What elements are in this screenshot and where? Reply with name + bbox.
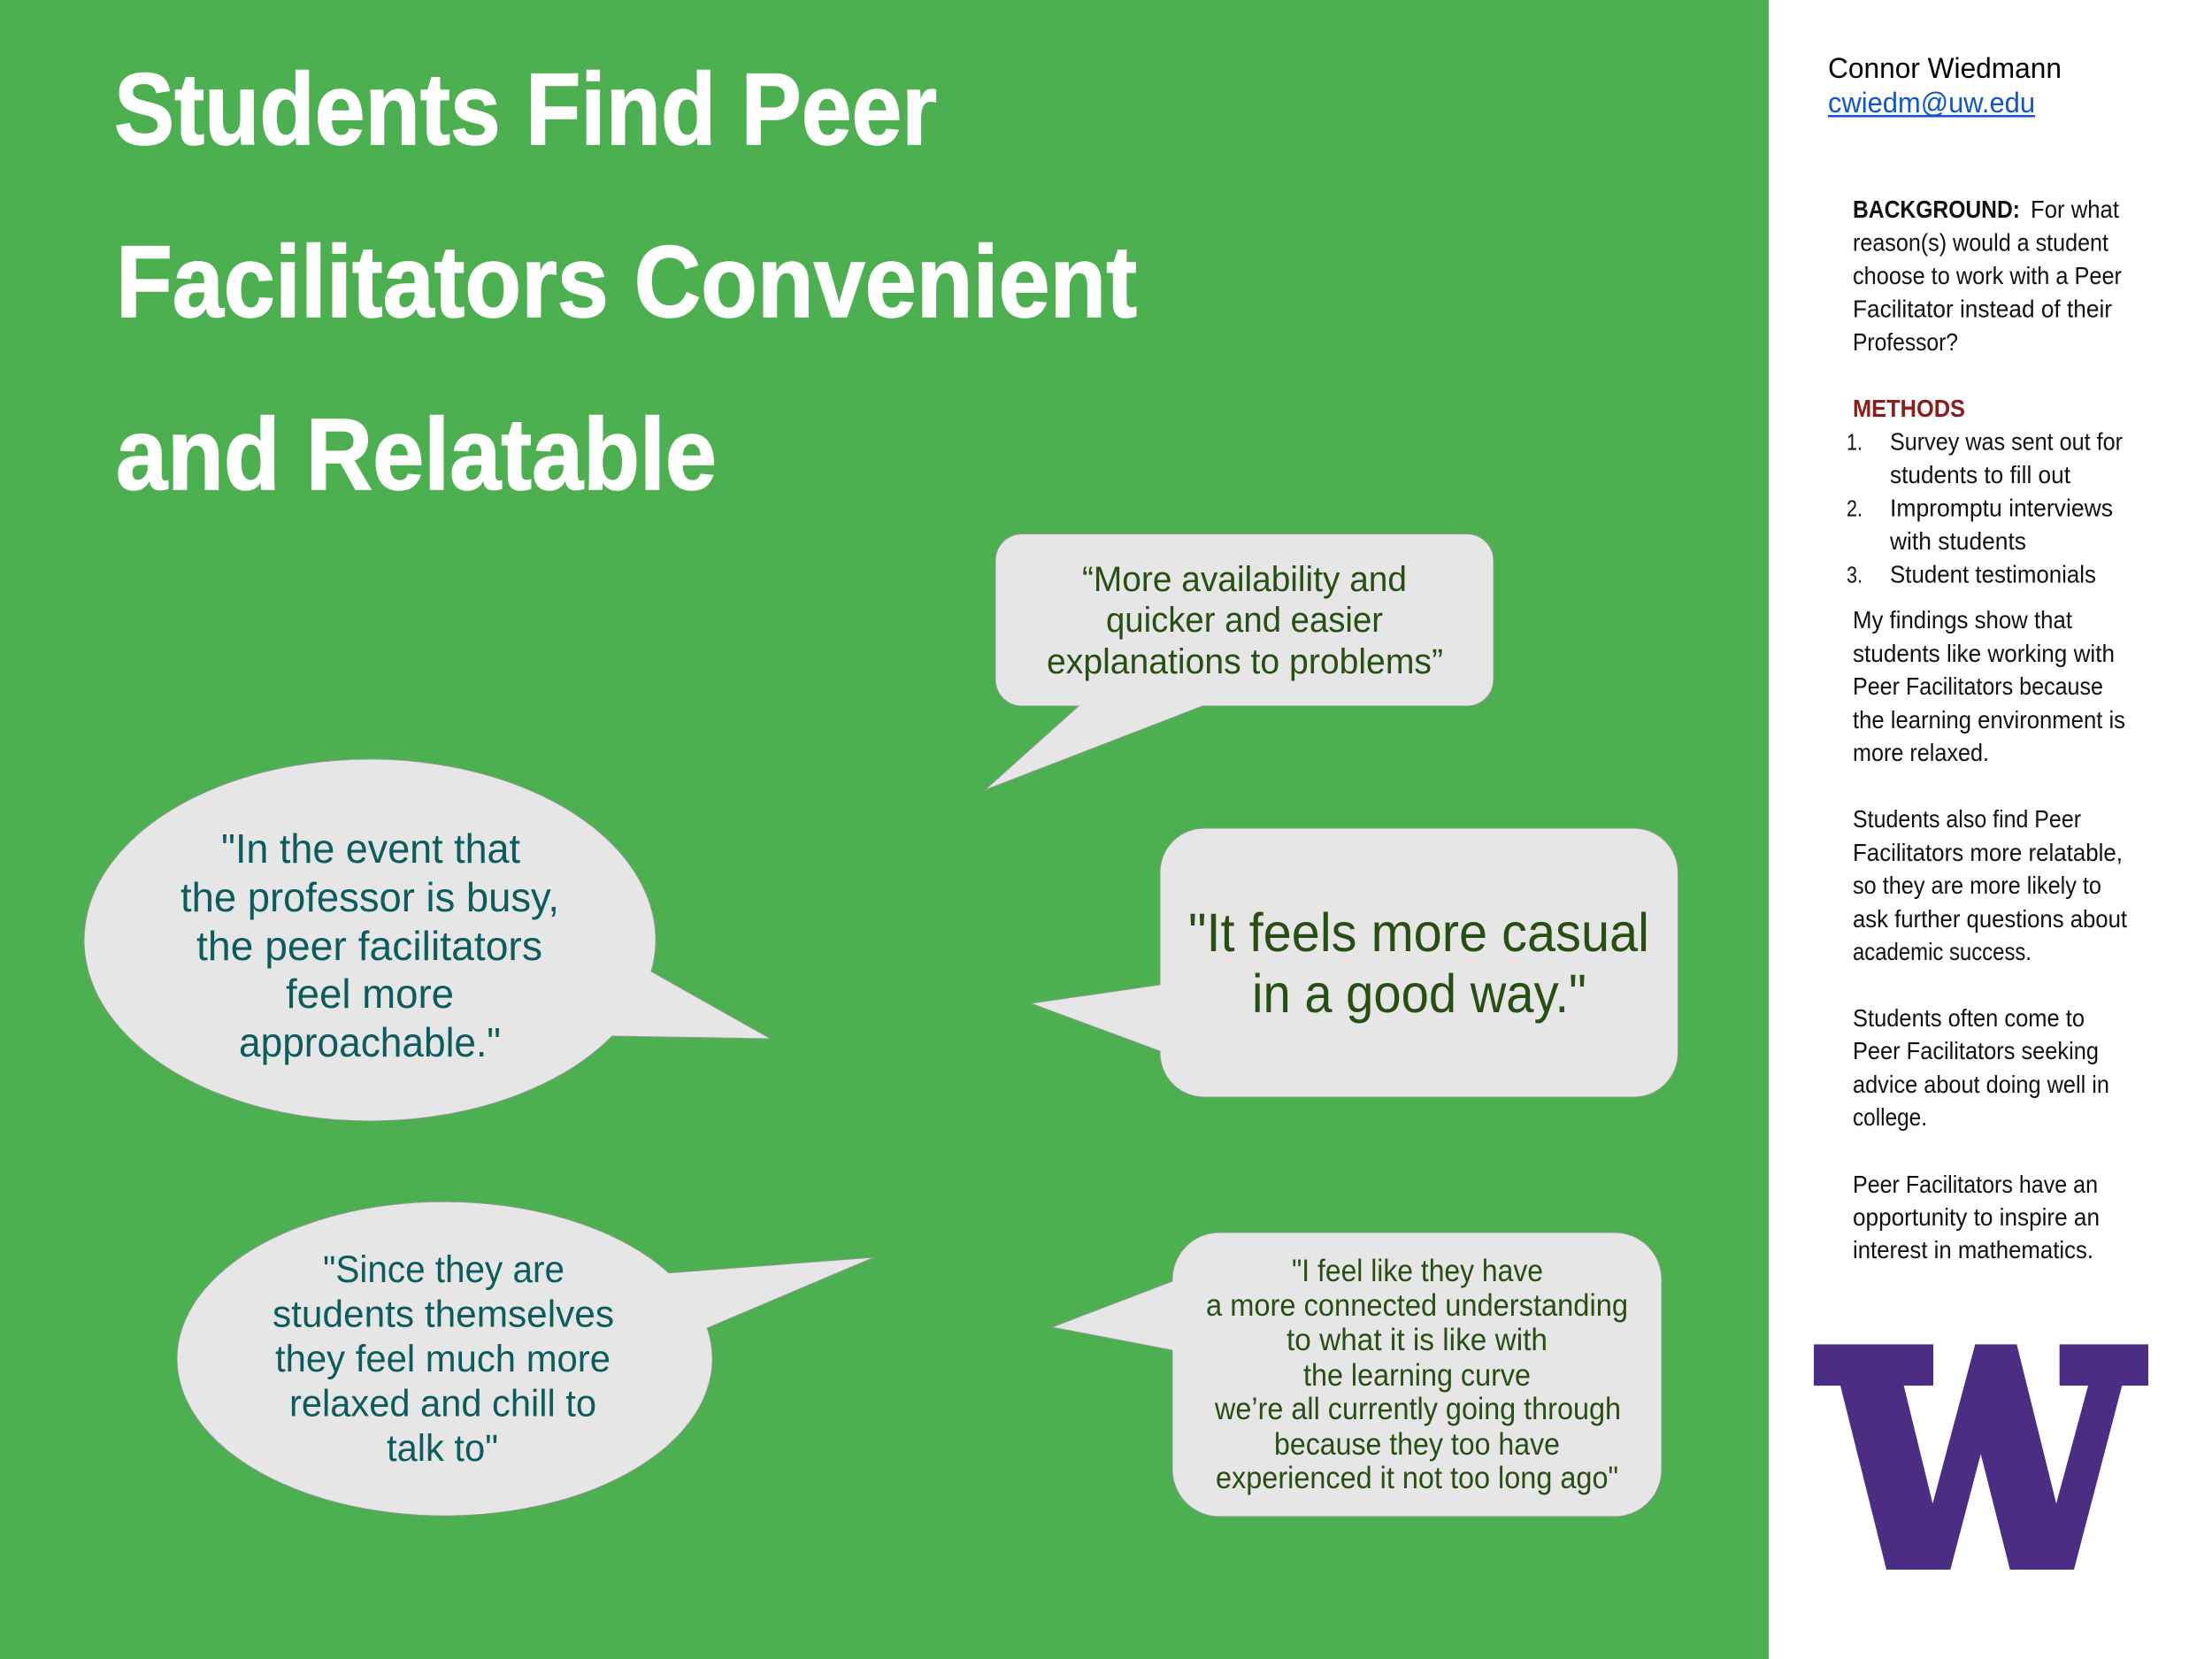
background text: choose to work with a Peer — [1853, 262, 2122, 289]
findings text: so they are more likely to — [1853, 872, 2101, 899]
findings text: more relaxed. — [1853, 739, 1989, 766]
speech bubble: professor is busy: "In the event that — [221, 826, 520, 872]
speech bubble: more availability — [985, 534, 1494, 790]
white sidebar panel — [1769, 0, 2212, 1659]
speech bubble: casual in a good way — [1031, 828, 1678, 1097]
speech bubble: students themselves: talk to" — [387, 1427, 498, 1470]
speech bubble: connected understanding: we’re all currently going through — [1214, 1392, 1621, 1426]
speech bubble: professor is busy: feel more — [286, 971, 454, 1017]
speech bubble: professor is busy: the peer facilitators — [196, 923, 542, 969]
speech bubble: students themselves: students themselves — [273, 1294, 614, 1336]
background text: For what — [2031, 196, 2119, 223]
background text — [1853, 196, 2122, 356]
findings text: college. — [1853, 1103, 1927, 1131]
methods list: Survey was sent out for — [1890, 428, 2123, 455]
findings text: academic success. — [1853, 938, 2032, 965]
findings text: Peer Facilitators have an — [1853, 1171, 2098, 1198]
green main panel — [0, 0, 1769, 1659]
findings text: ask further questions about — [1853, 905, 2127, 933]
speech bubble: professor is busy — [84, 759, 771, 1121]
title: Students Find Peer — [114, 53, 937, 166]
speech bubble: more availability: quicker and easier — [1106, 601, 1383, 640]
findings text: My findings show that — [1853, 606, 2072, 634]
speech bubble: connected understanding: the learning curve — [1303, 1358, 1531, 1393]
speech bubble: more availability: “More availability and — [1082, 560, 1407, 599]
methods list: Student testimonials — [1890, 561, 2096, 588]
findings text: Facilitators more relatable, — [1853, 839, 2123, 866]
methods list: 3. — [1847, 561, 1863, 588]
methods heading: METHODS — [1853, 395, 1965, 422]
findings text — [1853, 606, 2127, 1263]
methods list — [1847, 428, 2123, 588]
title: and Relatable — [116, 398, 717, 511]
speech bubble: students themselves: "Since they are — [323, 1248, 565, 1291]
methods list: Impromptu interviews — [1890, 494, 2113, 522]
speech bubble: connected understanding: experienced it not too long ago" — [1216, 1461, 1618, 1495]
title: Facilitators Convenient — [116, 226, 1137, 339]
background text: Professor? — [1853, 328, 1958, 356]
speech bubble: casual in a good way: in a good way." — [1252, 964, 1586, 1024]
background text: Facilitator instead of their — [1853, 296, 2112, 322]
methods list: 2. — [1847, 495, 1863, 522]
speech bubble: more availability: explanations to problems” — [1047, 642, 1443, 681]
findings text: advice about doing well in — [1853, 1071, 2109, 1098]
methods list: with students — [1889, 527, 2026, 555]
findings text: students like working with — [1853, 640, 2115, 667]
speech bubble: professor is busy: the professor is busy, — [180, 874, 559, 920]
speech bubble: connected understanding: because they too have — [1274, 1427, 1560, 1462]
methods list: 1. — [1847, 428, 1863, 455]
speech bubble: professor is busy: approachable." — [239, 1019, 501, 1065]
speech bubble: connected understanding: to what it is like with — [1286, 1323, 1548, 1357]
speech bubble: students themselves: they feel much more — [275, 1338, 611, 1380]
author name and email: Connor Wiedmann — [1828, 52, 2062, 84]
findings text: the learning environment is — [1853, 706, 2125, 733]
findings text: Students also find Peer — [1853, 805, 2081, 833]
author name and email — [1828, 52, 2062, 119]
findings text: interest in mathematics. — [1853, 1236, 2093, 1263]
author name and email: cwiedm@uw.edu — [1828, 87, 2035, 119]
speech bubble: students themselves — [177, 1202, 874, 1516]
speech bubble: connected understanding: a more connected understanding — [1206, 1288, 1628, 1323]
speech bubble: connected understanding: "I feel like they have — [1292, 1254, 1543, 1288]
methods list: students to fill out — [1890, 461, 2070, 488]
background text: BACKGROUND: — [1853, 196, 2020, 223]
findings text: Students often come to — [1853, 1004, 2085, 1032]
speech bubble: connected understanding — [1052, 1233, 1662, 1517]
speech bubble: students themselves: relaxed and chill to — [289, 1382, 596, 1425]
speech bubble: casual in a good way: "It feels more casual — [1188, 902, 1649, 963]
findings text: Peer Facilitators seeking — [1853, 1037, 2099, 1064]
icon: university W logo — [1814, 1344, 2148, 1570]
title — [114, 53, 1137, 511]
background text: reason(s) would a student — [1853, 228, 2108, 257]
findings text: opportunity to inspire an — [1853, 1203, 2100, 1231]
findings text: Peer Facilitators because — [1853, 672, 2103, 700]
